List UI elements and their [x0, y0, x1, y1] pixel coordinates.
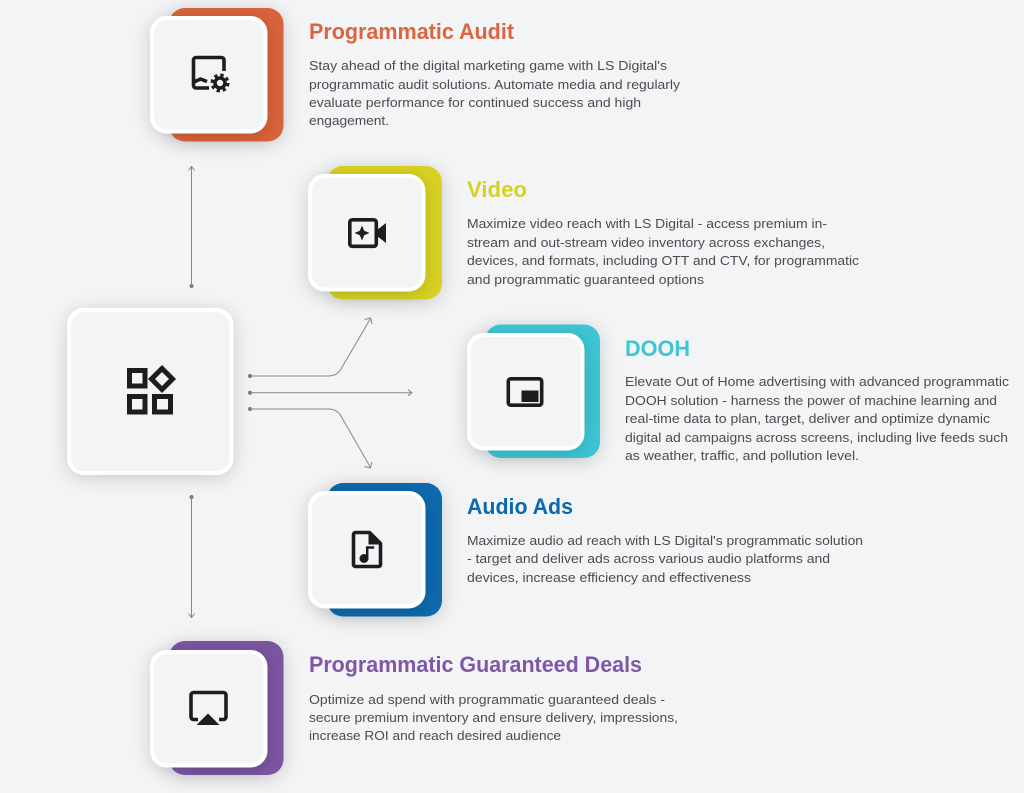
- text block: DOOH description: [625, 374, 1009, 463]
- colored backing card: cyan: [485, 324, 600, 458]
- text block: audit description: [309, 58, 680, 128]
- white card: [310, 176, 424, 290]
- heading: Programmatic Guaranteed Deals: Programmatic Guaranteed Deals: [309, 652, 642, 677]
- arrow: hub to Video: [248, 318, 372, 378]
- text block: DOOH description: as weather, traffic, and pollution level.: [625, 448, 859, 463]
- text block: audio description: - target and deliver ads across various audio platforms and: [467, 551, 830, 566]
- panel: Programmatic Audit: [152, 8, 680, 142]
- colored backing card: purple: [169, 641, 284, 775]
- colored backing card: blue: [327, 483, 442, 616]
- text block: guaranteed deals description: [309, 692, 678, 743]
- icon: audio file: [354, 532, 381, 566]
- text block: DOOH description: DOOH solution - harness the power of machine learning and: [625, 393, 997, 408]
- text block: DOOH description: digital ad campaigns across screens, including live feeds such: [625, 430, 1008, 445]
- heading: Video: Video: [467, 177, 527, 202]
- colored backing card: orange: [169, 8, 284, 142]
- panel: central hub: [69, 310, 232, 473]
- white card: [310, 493, 424, 606]
- icon: airplay screen: [191, 692, 226, 725]
- icon: app shapes grid: [130, 368, 172, 412]
- heading: Audio Ads: Audio Ads: [467, 494, 573, 519]
- arrow: hub to Programmatic Audit: [188, 166, 194, 288]
- text block: guaranteed deals description: increase ROI and reach desired audience: [309, 728, 561, 743]
- colored backing card: yellow: [327, 166, 442, 300]
- text block: DOOH description: Elevate Out of Home advertising with advanced programmatic: [625, 374, 1009, 389]
- icon: screen with gear: [194, 58, 228, 91]
- text block: video description: [467, 216, 859, 287]
- text block: video description: stream and out-stream video inventory across exchanges,: [467, 235, 825, 250]
- panel: Video: [310, 166, 859, 300]
- white card: [152, 652, 266, 766]
- panel: DOOH: [469, 324, 1009, 463]
- text block: video description: and programmatic guaranteed options: [467, 272, 704, 287]
- text block: video description: devices, and formats, including OTT and CTV, for programmatic: [467, 253, 859, 268]
- text block: audit description: Stay ahead of the digital marketing game with LS Digital's: [309, 58, 667, 73]
- icon: video camera with star: [350, 220, 386, 246]
- text block: audit description: evaluate performance for continued success and high: [309, 95, 641, 110]
- arrow: hub to DOOH: [248, 390, 412, 396]
- panel: Audio Ads: [310, 483, 863, 616]
- white hub card: [69, 310, 232, 473]
- heading: DOOH: DOOH: [625, 336, 690, 361]
- text block: audio description: Maximize audio ad reach with LS Digital's programmatic solution: [467, 533, 863, 548]
- arrow: hub to Audio Ads: [248, 407, 372, 468]
- icon: picture in picture screen: [508, 379, 542, 405]
- white card: [152, 18, 266, 132]
- heading: Programmatic Audit: Programmatic Audit: [309, 19, 515, 44]
- white card: [469, 335, 582, 448]
- text block: DOOH description: real-time data to plan, target, deliver and optimize dynamic: [625, 411, 990, 426]
- arrow: hub to Programmatic Guaranteed Deals: [188, 495, 194, 618]
- text block: audio description: [467, 533, 863, 585]
- text block: audio description: devices, increase efficiency and effectiveness: [467, 570, 751, 585]
- text block: video description: Maximize video reach with LS Digital - access premium in-: [467, 216, 827, 231]
- text block: guaranteed deals description: Optimize ad spend with programmatic guaranteed deals -: [309, 692, 665, 707]
- text block: audit description: engagement.: [309, 113, 389, 128]
- text block: guaranteed deals description: secure premium inventory and ensure delivery, impressions,: [309, 710, 678, 725]
- text block: audit description: programmatic audit solutions. Automate media and regularly: [309, 77, 680, 92]
- panel: Programmatic Guaranteed Deals: [152, 641, 678, 775]
